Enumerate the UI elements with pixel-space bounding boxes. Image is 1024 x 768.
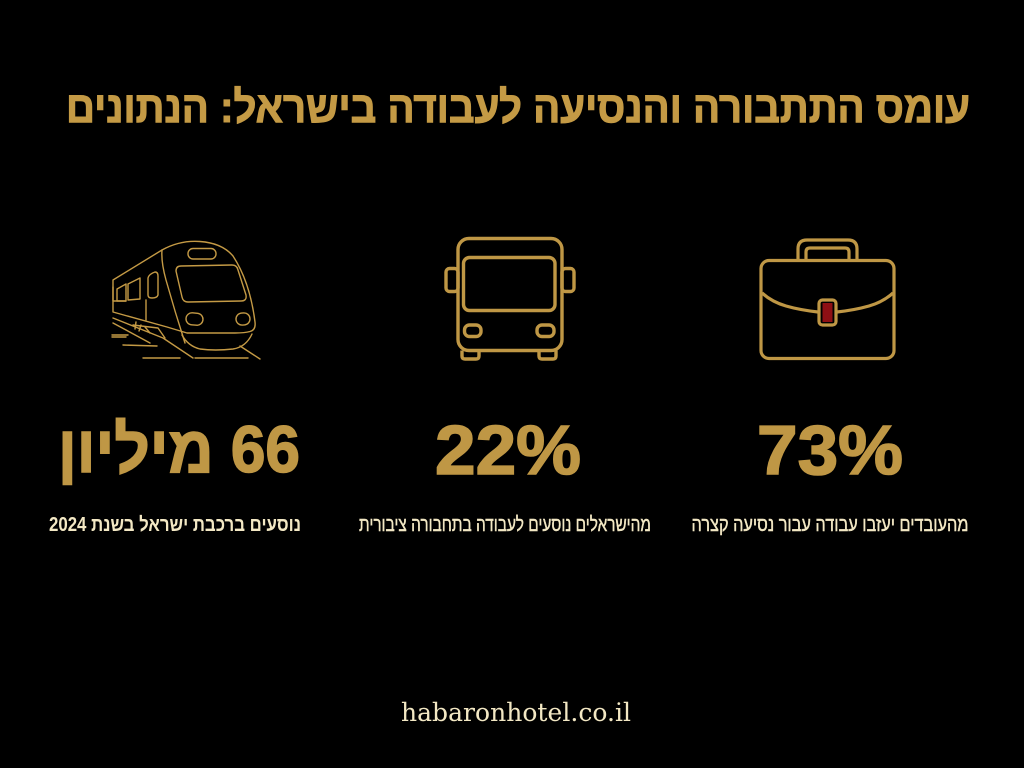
panel: train [49,241,301,536]
icon: clasp [822,303,832,322]
icon: bus [446,238,574,359]
stat: 66 million: 66 מיליון [58,412,300,486]
caption: bus: מהישראלים נוסעים לעבודה בתחבורה ציבורית [359,514,651,536]
panel: bus [359,238,651,536]
footer website: habaronhotel.co.il [401,698,631,727]
caption: train: נוסעים ברכבת ישראל בשנת 2024 [49,514,301,536]
stat: 73%: 73% [757,411,903,489]
caption: briefcase: מהעובדים יעזבו עבודה עבור נסיעה קצרה [692,514,968,536]
stat: 22%: 22% [435,411,581,489]
icon: train [112,241,260,359]
panel: briefcase [692,240,968,536]
icon: briefcase [761,240,894,358]
